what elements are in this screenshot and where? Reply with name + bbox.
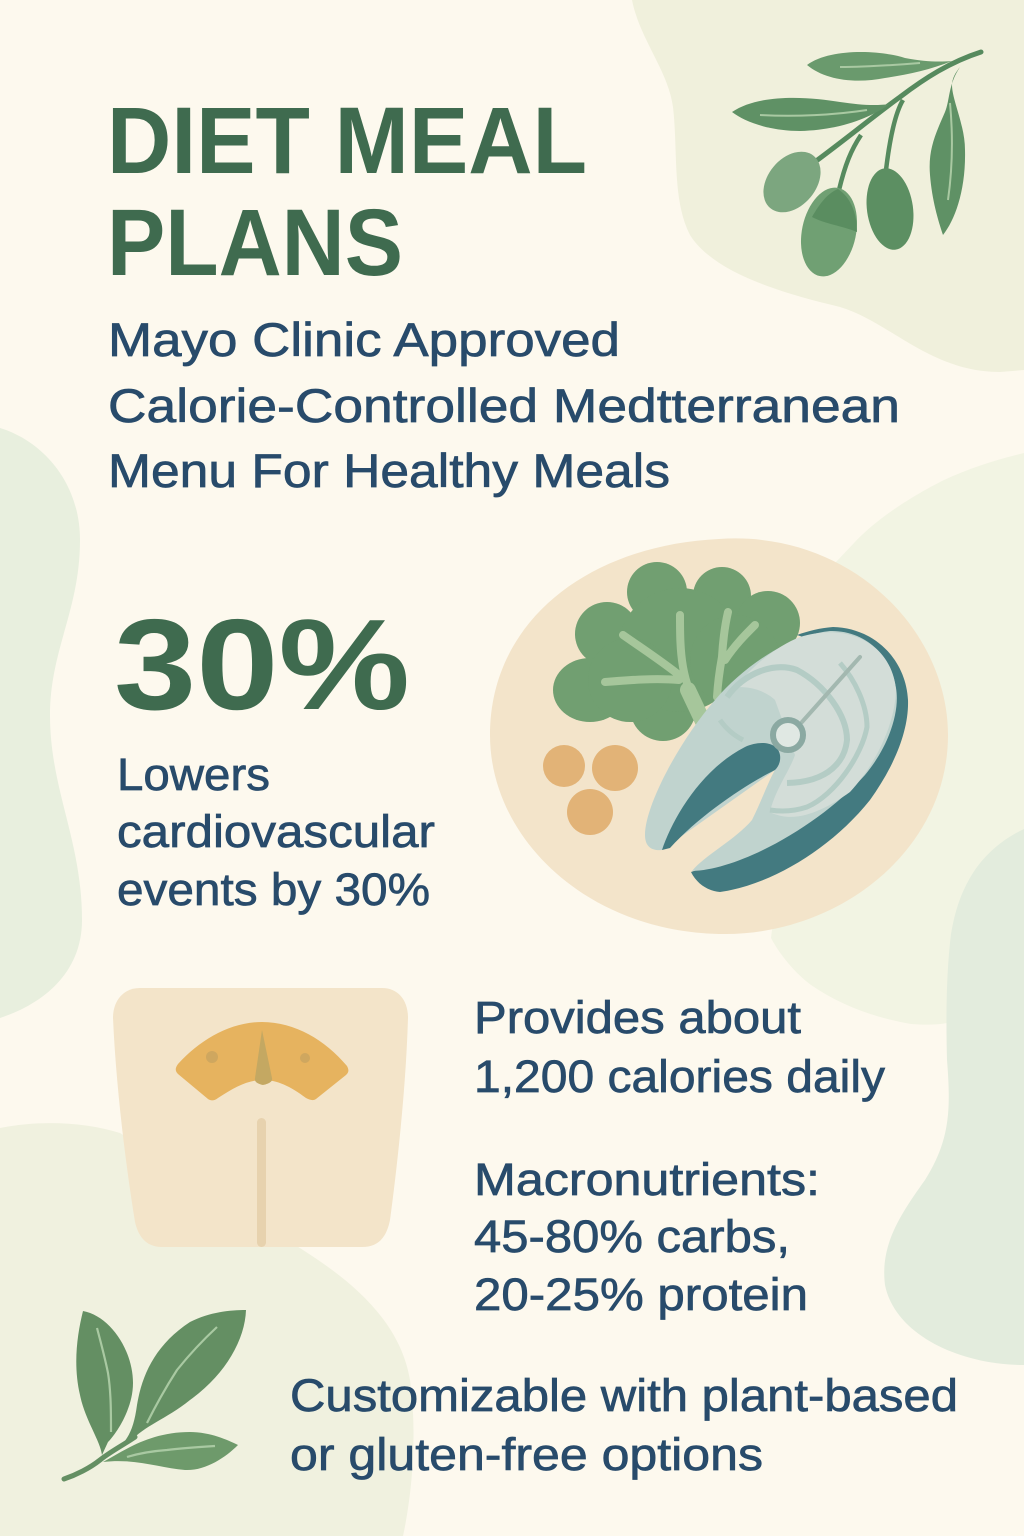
title: [107, 88, 587, 296]
salmon steak: [645, 627, 908, 892]
stat: 30%: 30%: [114, 593, 410, 737]
icon: bathroom scale: [113, 988, 408, 1247]
text: macronutrients: [474, 1154, 820, 1320]
text: calories: 1,200 calories daily: [474, 1051, 886, 1102]
icon: plate with salmon, greens and nuts: [490, 538, 948, 934]
subtitle: Menu For Healthy Meals: [108, 444, 670, 497]
stat description: cardiovascular: [117, 806, 435, 857]
icon: leaf sprig: [64, 1310, 246, 1479]
plate: [490, 538, 948, 934]
text: macronutrients: 20-25% protein: [474, 1269, 808, 1320]
nuts: [543, 745, 638, 835]
text: customization: [290, 1370, 958, 1480]
subtitle: [108, 313, 900, 497]
subtitle: Mayo Clinic Approved: [108, 313, 620, 366]
text: customization: Customizable with plant-based: [290, 1370, 958, 1421]
subtitle: Calorie-Controlled Medtterranean: [108, 379, 900, 432]
title: PLANS: [107, 190, 403, 296]
stat description: [117, 749, 435, 915]
text: customization: or gluten-free options: [290, 1429, 763, 1480]
text: macronutrients: 45-80% carbs,: [474, 1211, 790, 1262]
leafy greens: [553, 562, 800, 741]
icon: olive branch: [732, 52, 981, 282]
stat description: Lowers: [117, 749, 270, 800]
stat description: events by 30%: [117, 864, 430, 915]
text: macronutrients: Macronutrients:: [474, 1154, 820, 1205]
title: DIET MEAL: [107, 88, 587, 194]
text: calories: Provides about: [474, 992, 802, 1043]
text: calories: [474, 992, 886, 1102]
